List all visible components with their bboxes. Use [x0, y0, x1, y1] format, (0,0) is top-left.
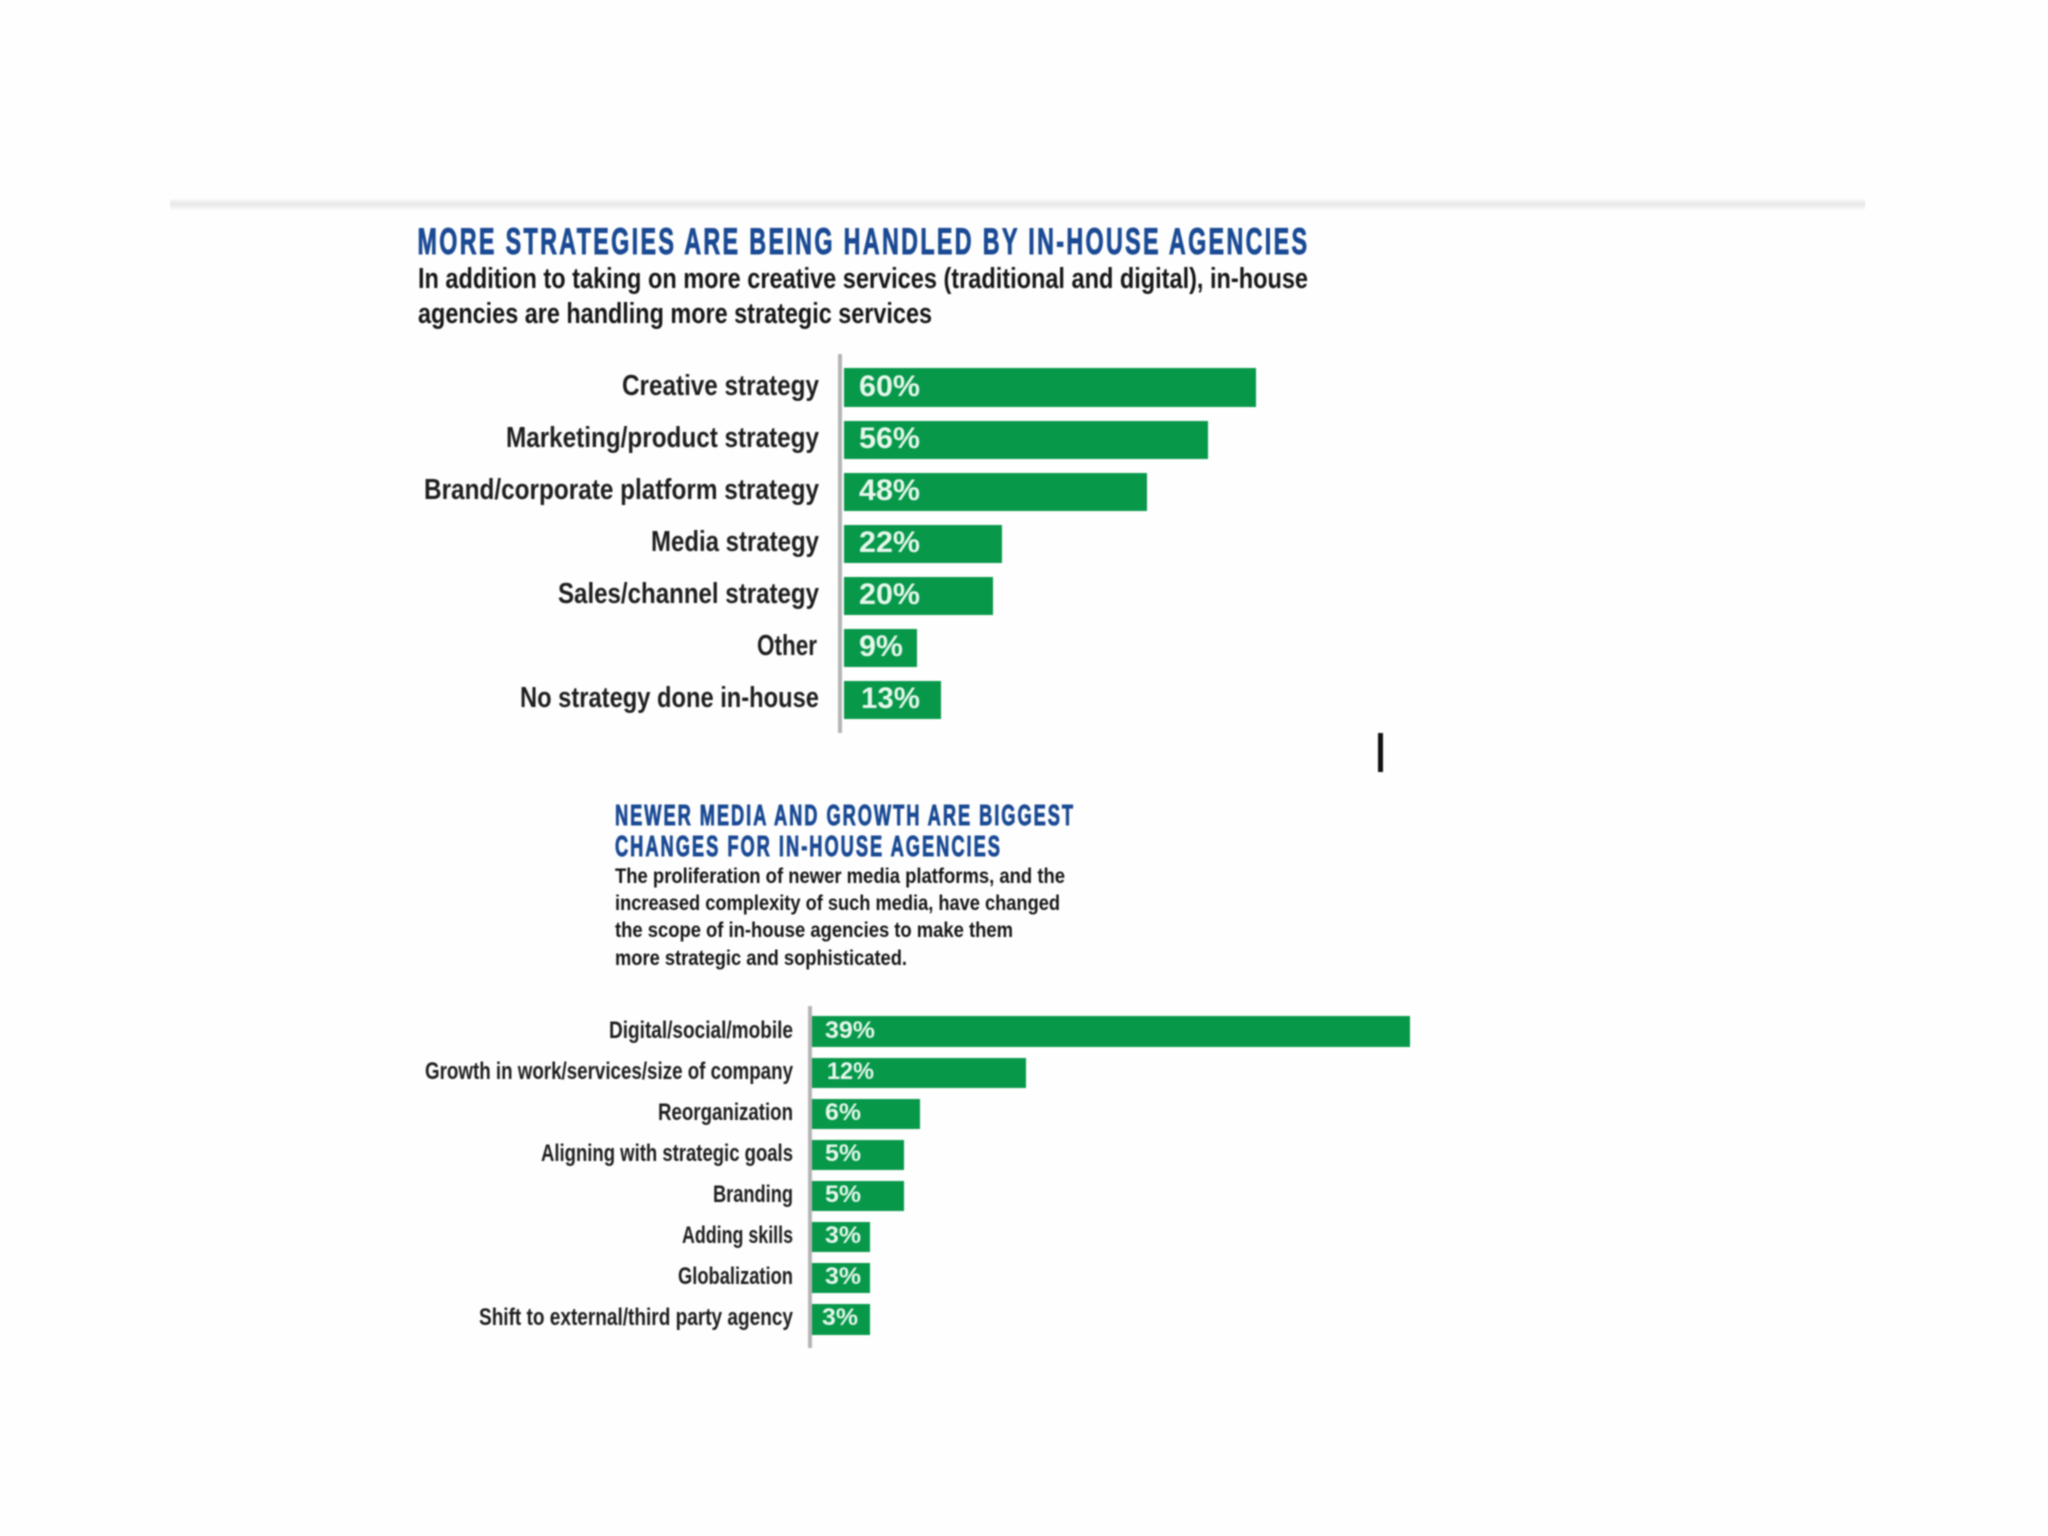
row: Shift to external/third party agency 3%: 3%	[822, 1304, 858, 1331]
row: Digital/social/mobile 39%: Digital/social/mobile	[609, 1017, 793, 1044]
text cursor mark	[1378, 733, 1383, 772]
body text: biggest changes: more strategic and sophisticated.	[615, 947, 907, 970]
top horizontal rule	[170, 198, 1865, 211]
row: Creative strategy 60%: 60%	[859, 370, 920, 403]
body text: biggest changes	[615, 865, 1065, 970]
row: Brand/corporate platform strategy 48%	[424, 473, 1147, 511]
row: Sales/channel strategy 20%: 20%	[859, 578, 920, 611]
heading: biggest changes	[615, 800, 1073, 863]
row: Digital/social/mobile 39%: 39%	[825, 1017, 875, 1044]
subheading: strategies	[418, 263, 1308, 330]
row: Aligning with strategic goals 5%: Aligning with strategic goals	[541, 1140, 793, 1167]
row: Branding 5%: 5%	[825, 1181, 861, 1208]
row: No strategy done in-house 13%: 13%	[861, 682, 920, 715]
row: Other 9%: Other	[757, 630, 817, 662]
subheading: strategies: In addition to taking on more creative services (traditional and digital), in-house	[418, 263, 1308, 295]
row: Media strategy 22%: 22%	[859, 526, 920, 559]
body text: biggest changes: The proliferation of newer media platforms, and the	[615, 865, 1065, 888]
row: Creative strategy 60%	[622, 368, 1256, 407]
row: Brand/corporate platform strategy 48%: Brand/corporate platform strategy	[424, 474, 819, 506]
row: Adding skills 3%: 3%	[825, 1222, 861, 1249]
row: Adding skills 3%: Adding skills	[682, 1222, 793, 1249]
row: Globalization 3%: Globalization	[678, 1263, 793, 1290]
bar chart: strategies	[424, 368, 1256, 719]
row: No strategy done in-house 13%: No strategy done in-house	[520, 682, 819, 714]
row: Sales/channel strategy 20%: Sales/channel strategy	[558, 578, 819, 610]
bar chart: biggest changes	[425, 1016, 1410, 1335]
row: Other 9%: 9%	[859, 630, 903, 663]
row: Sales/channel strategy 20%	[558, 577, 993, 615]
subheading: strategies: agencies are handling more strategic services	[418, 298, 932, 330]
row: Shift to external/third party agency 3%: Shift to external/third party agency	[479, 1304, 794, 1331]
chart axis: strategies	[838, 354, 842, 733]
row: Marketing/product strategy 56%: Marketing/product strategy	[506, 422, 819, 454]
row: Reorganization 6%: Reorganization	[658, 1099, 793, 1126]
row: Aligning with strategic goals 5%: 5%	[825, 1140, 861, 1167]
heading: strategies: MORE STRATEGIES ARE BEING HANDLED BY IN-HOUSE AGENCIES	[418, 220, 1307, 262]
row: Reorganization 6%	[658, 1099, 920, 1129]
panel: strategies handled in-house	[418, 220, 1308, 733]
chart axis: biggest changes	[808, 1006, 812, 1348]
body text: biggest changes: the scope of in-house agencies to make them	[615, 919, 1013, 942]
row: Marketing/product strategy 56%	[506, 421, 1208, 459]
row: Growth in work/services/size of company 12%: Growth in work/services/size of company	[425, 1058, 794, 1085]
row: Media strategy 22%: Media strategy	[651, 526, 819, 558]
heading: biggest changes: CHANGES FOR IN-HOUSE AGENCIES	[615, 831, 1000, 863]
row: Media strategy 22%	[651, 525, 1002, 563]
row: Branding 5%: Branding	[713, 1181, 793, 1208]
row: Brand/corporate platform strategy 48%: 48%	[859, 474, 920, 507]
row: Reorganization 6%: 6%	[825, 1099, 861, 1126]
heading: biggest changes: NEWER MEDIA AND GROWTH ARE BIGGEST	[615, 800, 1073, 832]
row: Branding 5%	[713, 1181, 904, 1211]
row: Digital/social/mobile 39%	[609, 1016, 1410, 1047]
row: Creative strategy 60%: Creative strategy	[622, 370, 819, 402]
row: Other 9%	[757, 629, 917, 667]
row: Marketing/product strategy 56%: 56%	[859, 422, 920, 455]
row: Globalization 3%: 3%	[825, 1263, 861, 1290]
row: Growth in work/services/size of company 12%: 12%	[827, 1058, 874, 1085]
body text: biggest changes: increased complexity of such media, have changed	[615, 892, 1060, 915]
panel: biggest changes	[425, 800, 1410, 1348]
